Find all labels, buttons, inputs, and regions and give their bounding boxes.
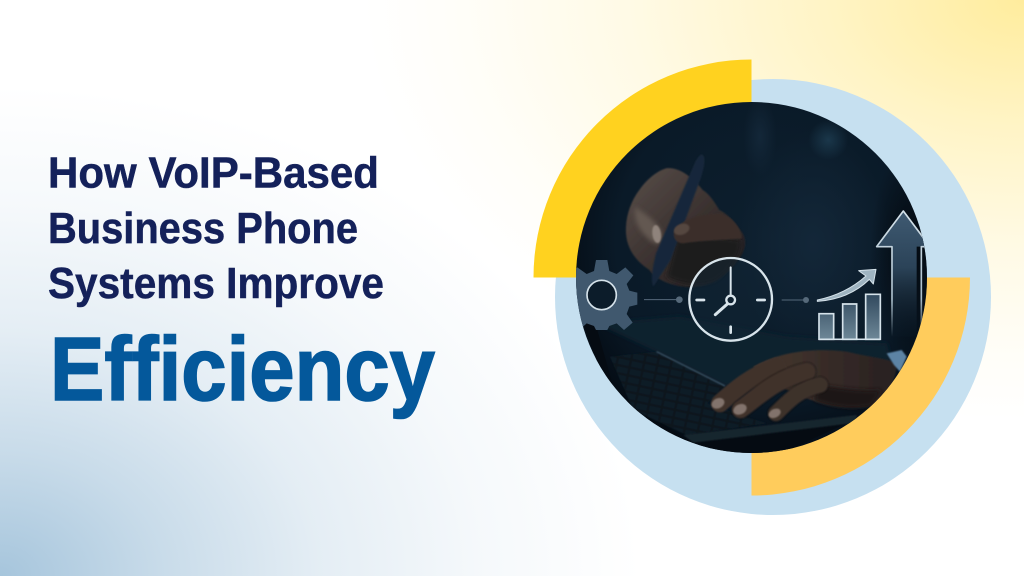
connector: gear to clock: [644, 296, 683, 303]
lower hand on keyboard: [710, 350, 907, 420]
highlighted word: Efficiency: Efficiency: [50, 320, 435, 420]
yellow quarter ring: [534, 60, 752, 278]
title line 1: How VoIP-Based: [48, 148, 379, 198]
thumb: [635, 207, 662, 244]
icon: gear: [576, 260, 638, 330]
suit sleeve shading: [597, 97, 950, 387]
pen: [652, 154, 704, 287]
icon: trend arrow: [817, 269, 876, 301]
lower palm shadow: [667, 237, 741, 284]
icon: large up arrow: [877, 211, 930, 337]
connector: clock to chart: [782, 297, 809, 303]
light blue disc: [555, 79, 991, 515]
orange quarter ring: [752, 278, 970, 496]
title line 3: Systems Improve: [48, 259, 384, 308]
icon: clock: [689, 258, 772, 341]
back of hand: [753, 350, 897, 408]
circular graphic: [534, 60, 991, 515]
shirt cuff: [887, 350, 907, 372]
photo: hands with efficiency icons: [576, 102, 927, 453]
index finger: [674, 213, 742, 243]
fingers: [720, 367, 820, 413]
icon: bar chart: [819, 294, 880, 339]
laptop keyboard: [592, 326, 857, 453]
title: [48, 148, 435, 420]
upper hand holding pen: [626, 154, 745, 287]
fingernails: [710, 396, 782, 420]
title line 2: Business Phone: [48, 204, 358, 253]
